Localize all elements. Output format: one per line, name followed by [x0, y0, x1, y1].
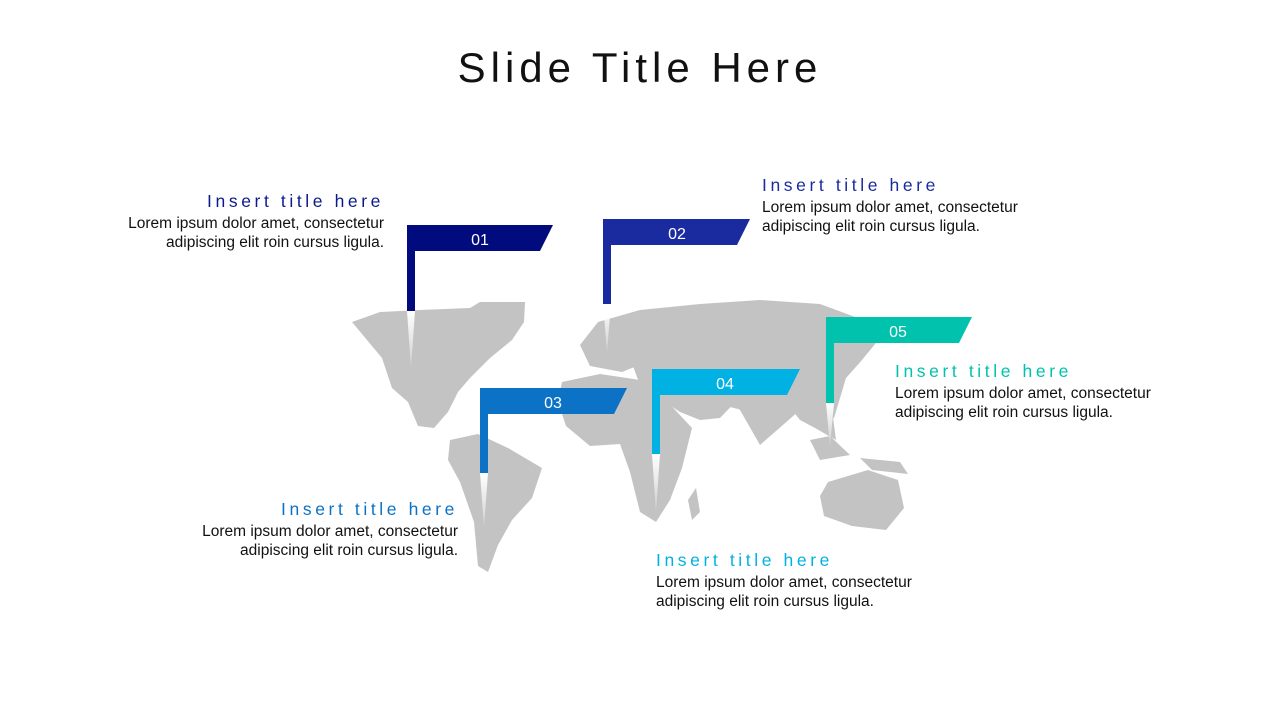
- flag 02: [603, 219, 750, 352]
- text 03: [202, 499, 458, 559]
- map: [352, 300, 908, 572]
- text 05: adipiscing elit roin cursus ligula.: [895, 404, 1113, 421]
- text 01: [128, 191, 384, 251]
- text 01: adipiscing elit roin cursus ligula.: [166, 234, 384, 251]
- flag 01: [407, 225, 553, 368]
- flag 05: [826, 317, 972, 446]
- text 04: [656, 550, 912, 610]
- text 01: Insert title here: [207, 191, 384, 211]
- text 02: adipiscing elit roin cursus ligula.: [762, 218, 980, 235]
- flag 04: [652, 369, 800, 512]
- text 05: Lorem ipsum dolor amet, consectetur: [895, 385, 1151, 402]
- text 02: Insert title here: [762, 175, 939, 195]
- text 03: Insert title here: [281, 499, 458, 519]
- flag 04: 04: [716, 376, 734, 393]
- text 04: Insert title here: [656, 550, 833, 570]
- flag 01: 01: [471, 232, 489, 249]
- text 03: Lorem ipsum dolor amet, consectetur: [202, 523, 458, 540]
- flag 05: 05: [889, 324, 907, 341]
- text 02: [762, 175, 1018, 235]
- flag 03: [480, 388, 627, 528]
- text 03: adipiscing elit roin cursus ligula.: [240, 542, 458, 559]
- text 02: Lorem ipsum dolor amet, consectetur: [762, 199, 1018, 216]
- text 05: Insert title here: [895, 361, 1072, 381]
- title: Slide Title Here: [458, 44, 822, 91]
- text 01: Lorem ipsum dolor amet, consectetur: [128, 215, 384, 232]
- flag 03: 03: [544, 395, 562, 412]
- flag 02: 02: [668, 226, 686, 243]
- text 05: [895, 361, 1151, 421]
- text 04: Lorem ipsum dolor amet, consectetur: [656, 574, 912, 591]
- text 04: adipiscing elit roin cursus ligula.: [656, 593, 874, 610]
